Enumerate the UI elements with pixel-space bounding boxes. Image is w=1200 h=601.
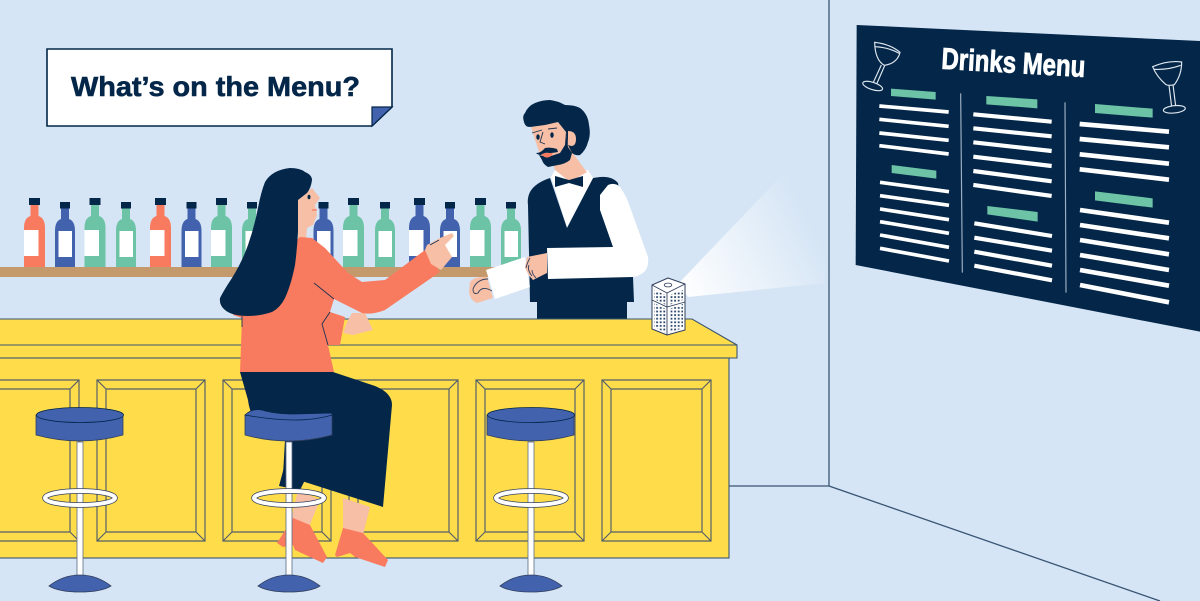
lips [312, 209, 317, 211]
upper hand [525, 253, 547, 280]
smart speaker [652, 278, 685, 335]
stool three [487, 408, 574, 592]
counter top [0, 319, 737, 358]
hand on bar [343, 313, 373, 335]
stool one [36, 408, 124, 592]
vest [528, 177, 634, 319]
counter edge line [0, 344, 737, 346]
torso and arm [233, 237, 440, 372]
shoes [277, 518, 388, 567]
board panel [856, 25, 1200, 332]
skirt [240, 372, 392, 507]
projected light beam [678, 130, 825, 297]
section headers [891, 89, 1153, 222]
callout: What's on the Menu: What’s on the Menu? [71, 71, 360, 102]
bartender [469, 100, 648, 319]
beard [539, 132, 572, 167]
speaker seams [652, 284, 685, 335]
eye [308, 195, 310, 199]
back leg of skirt [279, 460, 310, 490]
face [298, 188, 320, 240]
icon: left cocktail glass [862, 42, 900, 93]
legs [291, 490, 370, 535]
mouth [541, 153, 553, 158]
speaker body [652, 278, 685, 335]
row of bottles [24, 198, 521, 267]
neck and face [531, 122, 587, 182]
hair [523, 100, 590, 155]
ear [568, 131, 576, 146]
room corner lines [729, 0, 1160, 601]
mustache [536, 148, 558, 155]
icon: right cocktail glass [1153, 62, 1186, 114]
brows and nose [532, 128, 557, 144]
counter front [0, 358, 729, 558]
eyes [536, 132, 554, 140]
pointing hand [425, 233, 454, 270]
bow tie [555, 176, 583, 187]
column three text lines [1080, 124, 1169, 302]
board title: Drinks Menu [941, 43, 1086, 84]
clothing lines [242, 240, 439, 345]
callout: What's on the Menu [47, 49, 392, 126]
hand lines [473, 258, 536, 294]
bar counter [0, 319, 737, 558]
recessed panels [0, 380, 711, 541]
woman customer [220, 168, 454, 567]
column dividers [961, 93, 1066, 293]
lower sleeve [486, 257, 530, 299]
speaker perforations [654, 290, 683, 333]
sleeve raised [547, 184, 648, 279]
column two text lines [973, 114, 1052, 280]
menu board [856, 25, 1200, 332]
lower hand [469, 277, 493, 303]
speaker button [664, 283, 672, 287]
hair [220, 168, 312, 316]
column one text lines [879, 106, 949, 261]
shirt front [551, 170, 593, 227]
bottle shelf [0, 267, 495, 277]
stool two [245, 410, 332, 592]
